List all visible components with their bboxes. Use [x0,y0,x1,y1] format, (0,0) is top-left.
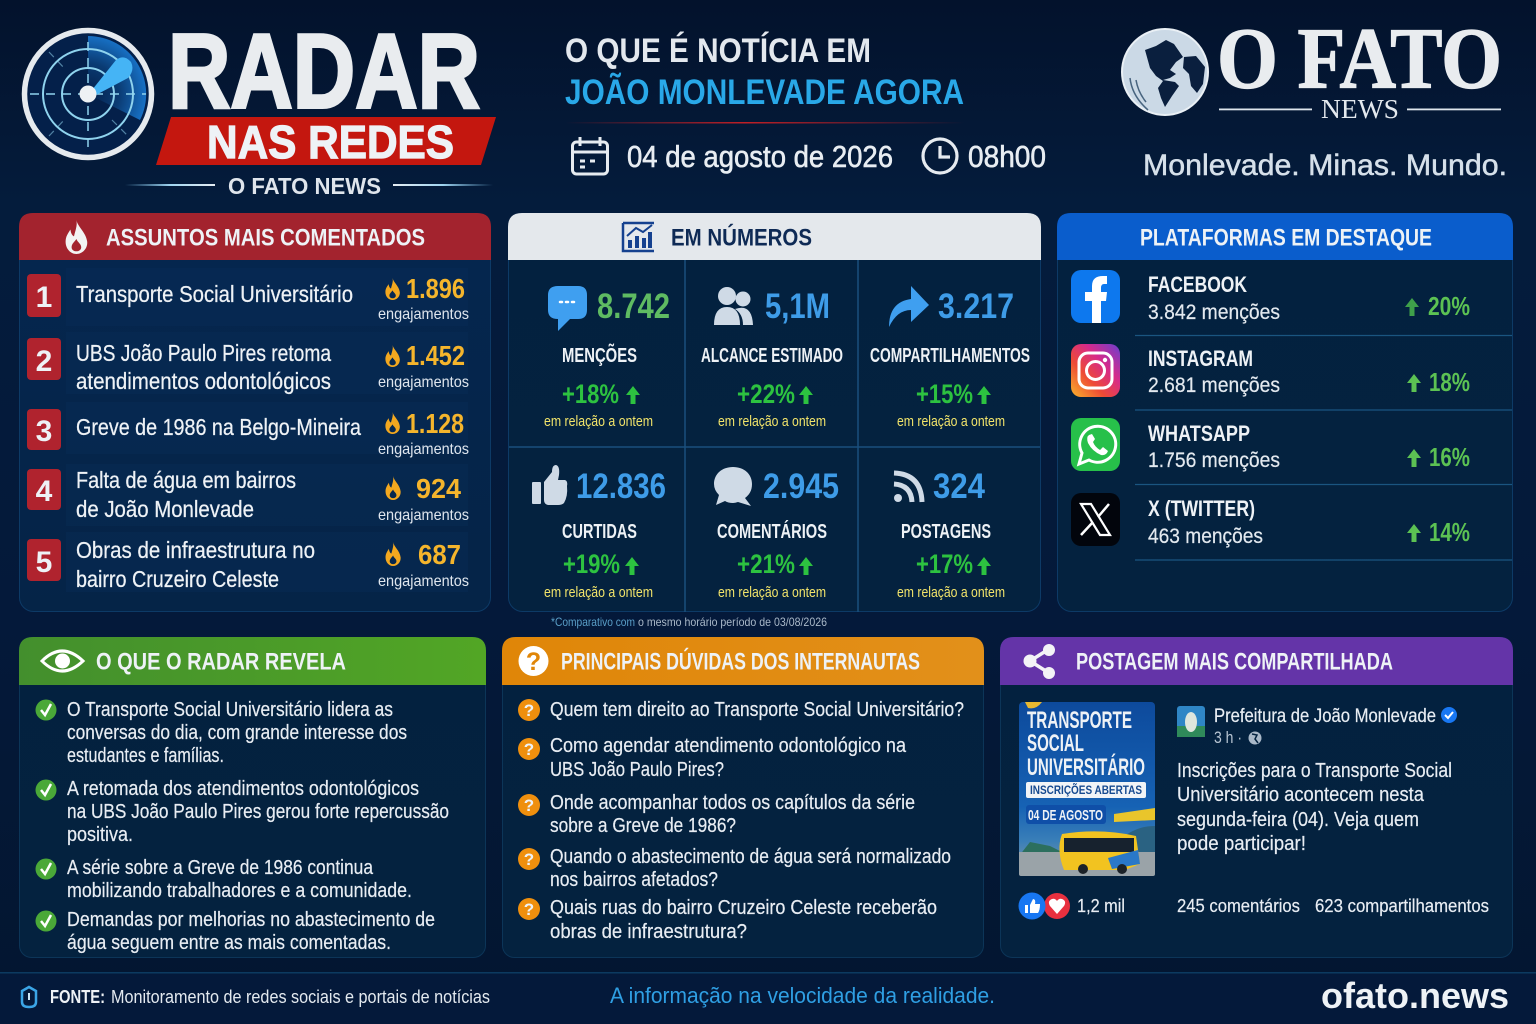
topic 2: 1.452 [406,340,465,371]
icon: instagram [1071,344,1120,397]
metric: alcance estimado [701,287,843,430]
topic 2: atendimentos odontológicos [76,368,331,394]
icon: people [714,287,753,325]
heading: PLATAFORMAS EM DESTAQUE [1140,224,1432,252]
insight 1: O Transporte Social Universitário lidera as [67,699,393,721]
platform: whatsapp: WHATSAPP [1148,421,1250,446]
topic 1: engajamentos [378,306,469,323]
metric: alcance estimado: +22% [737,379,795,409]
panel: o que o radar revela [19,637,486,958]
post thumbnail: SOCIAL [1027,730,1084,757]
site url: ofato.news [1321,975,1509,1016]
metric: postagens: +17% [916,549,973,579]
icon: thumbs up [532,465,567,505]
metric: comentários: em relação a ontem [718,584,826,601]
icon: share arrow [889,286,929,327]
topic 1: 1 [36,281,52,314]
slogan: Monlevade. Minas. Mundo. [1143,149,1507,182]
question 2: ? [524,740,534,759]
icon: feed [894,473,922,502]
logo: Radar nas Redes [24,12,496,199]
platform: x [1071,493,1470,548]
insight 4 [36,909,435,954]
wordmark: NEWS: NEWS [1321,94,1399,124]
topic 2: UBS João Paulo Pires retoma [76,340,331,366]
topic 2: 2 [36,345,52,378]
metric: comentários [714,467,839,601]
post thumbnail: INSCRIÇÕES ABERTAS [1030,782,1142,797]
metric: compartilhamentos: COMPARTILHAMENTOS [870,345,1030,367]
topic 3 [27,408,469,458]
insight 3 [36,857,412,902]
icon: flame [66,220,87,254]
heading: EM NÚMEROS [671,224,812,252]
topic 4: 4 [36,475,53,508]
platform: instagram: 18% [1429,367,1470,397]
platform: whatsapp: 1.756 menções [1148,449,1280,472]
icon: eye [42,651,83,671]
platform: facebook [1071,270,1470,324]
topic 5: Obras de infraestrutura no [76,537,315,563]
insight 3: mobilizando trabalhadores e a comunidade. [67,880,412,902]
heading: O QUE É NOTÍCIA EM [565,32,871,70]
question 3: Onde acompanhar todos os capítulos da série [550,792,915,814]
insight 1: conversas do dia, com grande interesse dos [67,722,407,744]
topic 3: 3 [36,415,52,448]
heading: O QUE O RADAR REVELA [96,648,346,676]
question 4: ? [524,850,534,869]
icon: facebook [1071,270,1120,323]
metric: compartilhamentos: em relação a ontem [897,413,1005,430]
question 2: UBS João Paulo Pires? [550,759,724,781]
metric: menções [544,286,670,430]
platform: x: 463 menções [1148,525,1263,548]
question 4: nos bairros afetados? [550,869,718,891]
post text: pode participar! [1177,833,1306,855]
platform: instagram: 2.681 menções [1148,374,1280,397]
topic 4: Falta de água em bairros [76,467,296,493]
icon: chart [623,223,654,251]
footnote [551,615,827,629]
metric: postagens: POSTAGENS [901,521,991,543]
panel: em números [508,213,1041,612]
metric: postagens [894,467,1005,601]
reactions [1018,892,1125,920]
metric: alcance estimado: ALCANCE ESTIMADO [701,345,843,367]
topic 5 [27,537,469,592]
metric: comentários: 2.945 [763,467,839,506]
icon: speech bubble [548,286,587,331]
topic 3: 1.128 [406,408,464,439]
topic 4 [27,467,469,524]
heading: PRINCIPAIS DÚVIDAS DOS INTERNAUTAS [561,648,920,676]
platform: instagram: INSTAGRAM [1148,346,1253,371]
insight 1: estudantes e famílias. [67,745,224,767]
reactions: 1,2 mil [1077,896,1125,916]
platform: whatsapp: 16% [1429,442,1470,472]
icon: radar [24,30,152,158]
metric: menções: em relação a ontem [544,413,653,430]
topic 2: engajamentos [378,374,469,391]
topic 4: engajamentos [378,507,469,524]
time: 08h00 [968,139,1046,174]
tagline: A informação na velocidade da realidade. [610,983,995,1008]
insight 4: água seguem entre as mais comentadas. [67,932,391,954]
heading: location: JOÃO MONLEVADE AGORA [565,73,964,112]
banner: NAS REDES: NAS REDES [207,116,454,168]
wordmark: O FATO: O FATO [1217,10,1502,106]
icon: question [518,646,548,676]
question 3: sobre a Greve de 1986? [550,815,736,837]
question 4: Quando o abastecimento de água será normalizado [550,846,951,868]
icon: share [1024,644,1055,679]
insight 2 [36,778,449,846]
topic 5: engajamentos [378,573,469,590]
topic 4: 924 [416,473,461,504]
icon: source [22,987,36,1007]
topic 2 [27,338,469,394]
metric: comentários: +21% [737,549,795,579]
platform: facebook: 20% [1428,291,1470,321]
footnote: o mesmo horário período de 03/08/2026 [638,615,827,629]
topic 5: 5 [36,546,52,579]
source: FONTE: [50,987,105,1007]
metric: alcance estimado: 5,1M [765,287,830,326]
question 5: obras de infraestrutura? [550,921,747,943]
comment count: 245 comentários [1177,896,1300,916]
post text [1177,760,1452,855]
topic 1: 1.896 [406,273,465,304]
icon: verified [1441,707,1457,723]
question 3 [518,792,915,837]
topic 1: Transporte Social Universitário [76,281,353,307]
question 4 [518,846,951,891]
icon: whatsapp [1071,418,1120,471]
post thumbnail: TRANSPORTE [1027,707,1132,734]
topic 5: bairro Cruzeiro Celeste [76,566,279,592]
logo: O Fato News [1122,10,1507,182]
question 5: ? [524,900,534,919]
source: Monitoramento de redes sociais e portais de notícias [111,987,490,1007]
metric: curtidas: +19% [563,549,620,579]
metric: compartilhamentos [870,286,1030,430]
platform: facebook: FACEBOOK [1148,272,1247,297]
question 3: ? [524,796,534,815]
icon: comment bubble [714,467,752,506]
insight 1 [36,699,407,767]
metric: curtidas: CURTIDAS [562,521,637,543]
question 1: Quem tem direito ao Transporte Social Universitário? [550,699,964,721]
panel: postagem mais compartilhada [1000,637,1513,958]
insight 2: A retomada dos atendimentos odontológicos [67,778,419,800]
metric: curtidas [532,465,666,601]
question 5: Quais ruas do bairro Cruzeiro Celeste receberão [550,897,937,919]
icon: clock [923,139,957,173]
metric: curtidas: 12.836 [576,467,666,506]
share count: 623 compartilhamentos [1315,896,1489,916]
icon: globe [1122,29,1208,115]
platform: instagram [1071,344,1470,397]
question 1: ? [524,701,534,720]
date: 04 de agosto de 2026 [627,139,893,174]
metric: comentários: COMENTÁRIOS [717,520,827,543]
post thumbnail: UNIVERSITÁRIO [1027,753,1145,781]
footer [0,972,1536,1024]
question 2: Como agendar atendimento odontológico na [550,735,907,757]
icon: calendar [572,137,608,174]
metric: alcance estimado: em relação a ontem [718,413,826,430]
metric: menções: MENÇÕES [562,343,637,367]
insight 4: Demandas por melhorias no abastecimento de [67,909,435,931]
avatar [1177,706,1205,737]
post thumbnail: 04 DE AGOSTO [1028,807,1103,824]
metric: postagens: 324 [933,467,985,506]
topic 4: de João Monlevade [76,496,254,522]
topic 5: 687 [418,539,461,570]
insight 2: positiva. [67,824,133,846]
icon: x [1071,493,1120,546]
metric: menções: 8.742 [597,287,670,326]
panel: principais dúvidas [502,637,984,958]
platform: whatsapp [1071,418,1470,472]
question 2 [518,735,907,781]
topic 3: Greve de 1986 na Belgo-Mineira [76,414,361,440]
post thumbnail [1019,702,1155,876]
metric: compartilhamentos: +15% [916,379,973,409]
post text: Inscrições para o Transporte Social [1177,760,1452,782]
icon: question: ? [526,648,541,676]
topic 3: engajamentos [378,441,469,458]
post text: Universitário acontecem nesta [1177,784,1425,806]
platform: facebook: 3.842 menções [1148,301,1280,324]
question 5 [518,897,937,943]
panel: assuntos mais comentados [19,213,491,612]
metric: curtidas: em relação a ontem [544,584,653,601]
topic 1 [27,273,469,323]
wordmark: RADAR: RADAR [168,12,480,130]
heading: ASSUNTOS MAIS COMENTADOS [106,224,425,252]
platform: x: 14% [1429,517,1470,547]
insight 3: A série sobre a Greve de 1986 continua [67,857,374,879]
insight 2: na UBS João Paulo Pires gerou forte repercussão [67,801,449,823]
footnote: *Comparativo com [551,615,635,629]
metric: compartilhamentos: 3.217 [938,287,1014,326]
post text: segunda-feira (04). Veja quem [1177,809,1419,831]
panel: plataformas em destaque [1057,213,1513,612]
tagline: O FATO NEWS: O FATO NEWS [228,173,381,199]
platform: x: X (TWITTER) [1148,496,1255,521]
metric: menções: +18% [562,379,619,409]
heading: POSTAGEM MAIS COMPARTILHADA [1076,648,1393,676]
headline and date [565,32,1046,174]
page name: Prefeitura de João Monlevade [1214,706,1436,727]
timestamp: 3 h · [1214,728,1242,747]
metric: postagens: em relação a ontem [897,584,1005,601]
